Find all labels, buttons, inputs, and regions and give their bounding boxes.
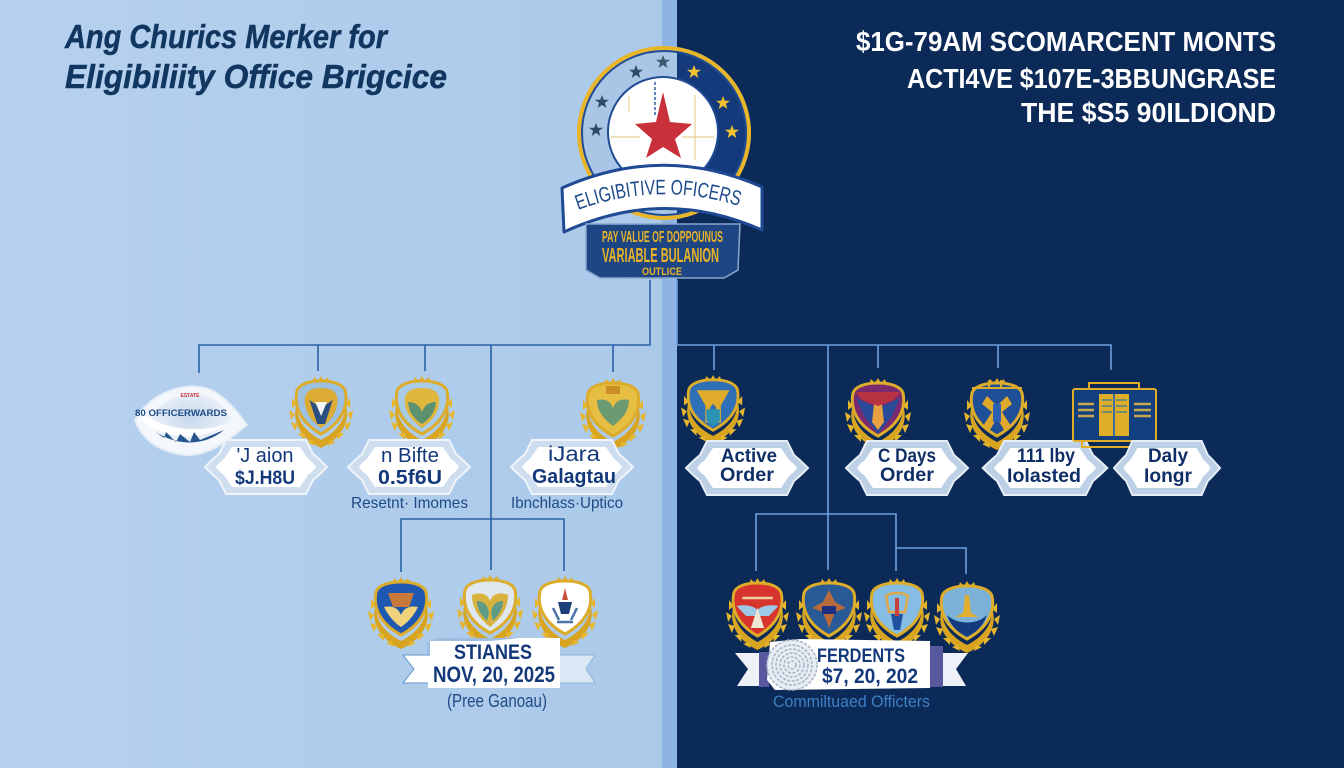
ribbon: Ferdents date — [735, 639, 968, 690]
crest: lower left 3 — [532, 576, 598, 648]
emblem: wing logo — [135, 387, 247, 455]
right title: $1G-79AM SCOMARCENT MONTS — [856, 26, 1276, 57]
caption: Commiltuaed Officters: Commiltuaed Officters — [773, 692, 930, 711]
plaque: Active Order: Order — [720, 465, 775, 486]
plaque: Daly Iongr: Daly — [1148, 446, 1188, 467]
plaque: 111 by Iolasted — [983, 441, 1107, 495]
plaque: C Days Order: Order — [880, 465, 935, 486]
connector lines: left tree — [199, 280, 650, 572]
left title: Eligibiliity Office Brigcice — [65, 58, 447, 95]
badge red star — [635, 92, 692, 158]
badge ribbon — [562, 165, 762, 232]
plaque: Vaion: 'J aion — [236, 445, 294, 467]
ribbon: Ferdents date: $7, 20, 202 — [822, 665, 918, 688]
crest: upper right 1 — [681, 375, 745, 444]
badge plaque text: PAY VALUE OF DOPPOUNUS — [602, 229, 723, 246]
fingerprint seal — [767, 640, 817, 690]
plaque: Vaion: $J.H8U — [235, 468, 295, 489]
plaque: Jara: Galagtau — [532, 466, 616, 488]
badge plaque text: OUTLICE — [642, 266, 682, 278]
crest: lower right 4 — [934, 581, 1000, 653]
plaque: 111 by Iolasted: 111 lby — [1017, 446, 1075, 467]
small stars — [589, 55, 739, 138]
right title — [856, 26, 1276, 128]
right title: THE $S5 90ILDIOND — [1021, 97, 1276, 128]
plaque: Daly Iongr — [1114, 441, 1220, 495]
emblem: wing logo: ESTATE — [181, 393, 200, 399]
caption: Ibnchlass Uptico: Ibnchlass·Uptico — [511, 495, 623, 512]
ribbon: Ferdents date: FERDENTS — [817, 646, 905, 667]
plaque: C Days Order: C Days — [878, 446, 936, 467]
central badge — [560, 46, 764, 279]
ribbon: Stianes date: NOV, 20, 2025 — [433, 662, 555, 687]
left panel background — [0, 0, 663, 768]
crest: lower right 2 — [796, 578, 862, 650]
crest: upper left 1 — [289, 376, 353, 448]
emblem: wing logo: 80 OFFICERWARDS — [135, 408, 227, 418]
right title: ACTI4VE $107E-3BBUNGRASE — [907, 63, 1276, 94]
caption: Resetnt Imomes: Resetnt· Imomes — [351, 495, 468, 512]
crest: upper right 2 — [845, 378, 911, 450]
plaque: Active Order: Active — [721, 446, 777, 467]
plaque: Bifte: 0.5f6U — [378, 467, 442, 489]
plaque: Jara — [511, 440, 633, 494]
badge ribbon text: ELIGIBITIVE OFICERS — [574, 180, 742, 210]
plaque: Bifte — [348, 440, 470, 494]
plaque: 111 by Iolasted: Iolasted — [1007, 466, 1081, 487]
badge plaque — [586, 224, 740, 278]
badge plaque text — [602, 229, 723, 278]
plaque: C Days Order — [846, 441, 968, 495]
ribbon: Stianes date: STIANES — [454, 641, 532, 664]
crest: upper left 3 — [580, 378, 646, 450]
plaque: Vaion — [205, 440, 327, 494]
centre divider strip — [662, 0, 677, 768]
connector lines: right tree — [677, 280, 1111, 574]
plaque: Daly Iongr: Iongr — [1144, 466, 1193, 487]
crest: lower right 1 — [726, 578, 789, 650]
plaque: Active Order — [686, 441, 808, 495]
badge plaque text: VARIABLE BULANION — [602, 245, 719, 267]
left title: Ang Churics Merker for — [64, 18, 389, 55]
crest: lower left 1 — [368, 577, 434, 649]
left title — [64, 18, 447, 95]
right panel background — [677, 0, 1344, 768]
plaque: Jara: iJara — [548, 443, 600, 466]
crest: upper left 2 — [389, 376, 455, 448]
plaque: Bifte: n Bifte — [381, 445, 439, 467]
badge ring — [577, 46, 751, 220]
ribbon: Stianes date — [403, 638, 595, 688]
crest: lower left 2 — [457, 575, 523, 647]
icon: document panel — [1073, 383, 1156, 447]
caption: Pree Ganoau: (Pree Ganoau) — [447, 691, 547, 711]
crest: upper right 3 — [964, 378, 1030, 450]
crest: lower right 3 — [864, 578, 930, 650]
